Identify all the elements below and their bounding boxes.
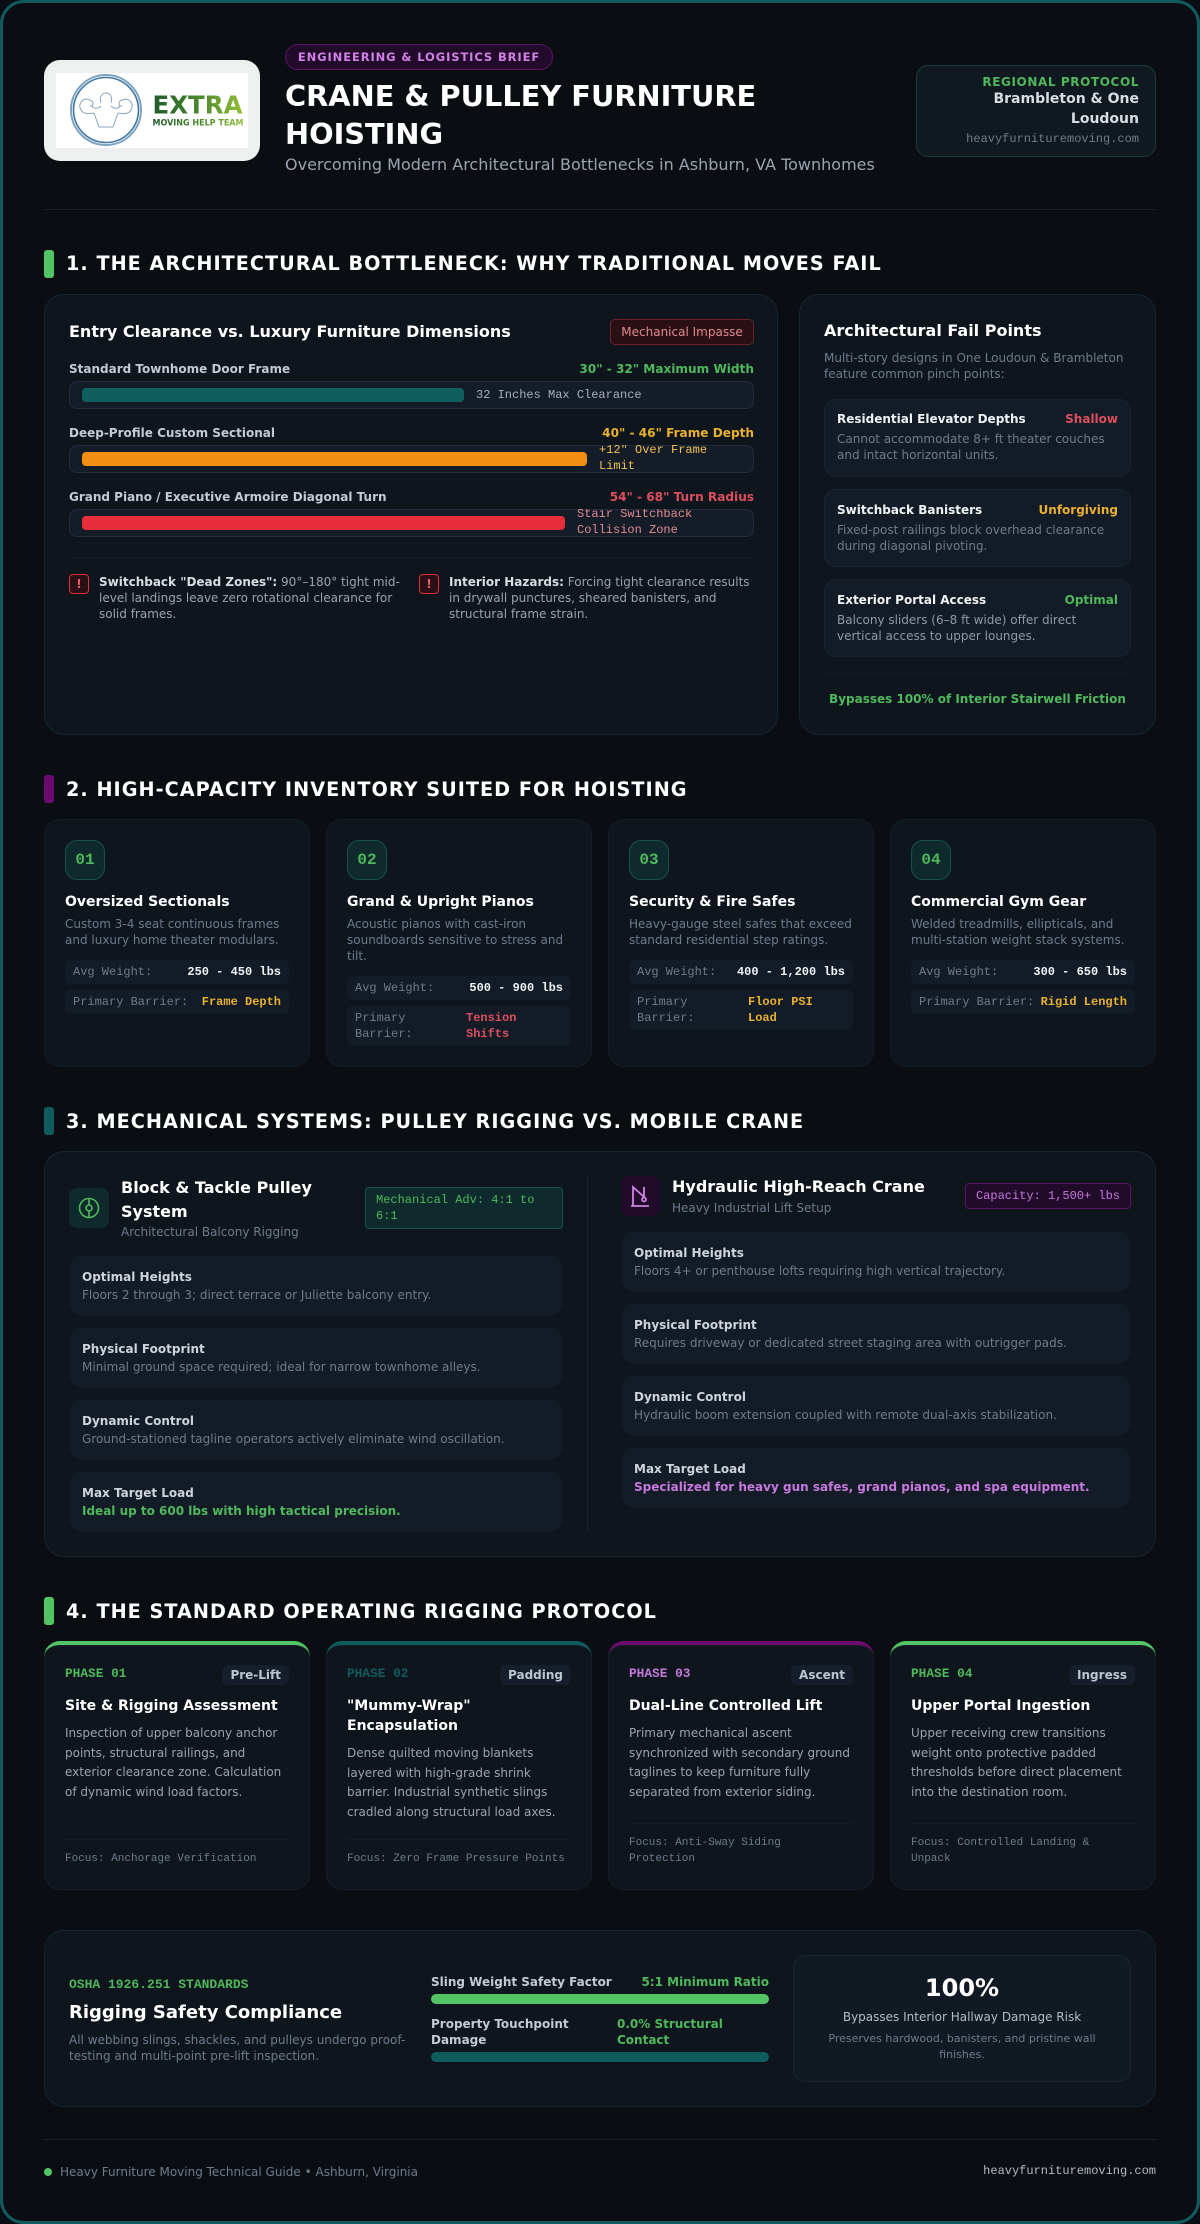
metric: touchpoint damage: 0.0% Structural <box>617 2017 723 2031</box>
subtitle: Overcoming Modern Architectural Bottlenecks in Ashburn, VA Townhomes <box>285 155 875 174</box>
phase card 4: into the destination room. <box>911 1784 1067 1798</box>
phase card 1: points, structural railings, and <box>65 1746 245 1760</box>
panel: entry clearance chart <box>44 294 778 735</box>
bar: piano <box>69 509 754 537</box>
row: control crane: Dynamic Control <box>634 1390 746 1404</box>
badge: mechanical advantage: 6:1 <box>376 1209 398 1223</box>
title <box>285 79 756 151</box>
section heading 4: 4. THE STANDARD OPERATING RIGGING PROTOCOL <box>66 1600 657 1623</box>
fail point: portal: Optimal <box>1065 593 1118 607</box>
row: control pulley: Dynamic Control <box>82 1414 194 1428</box>
phase card 4: Unpack <box>911 1853 951 1865</box>
card: gym gear: Welded treadmills, ellipticals, and <box>911 917 1113 931</box>
phase card 1 <box>44 1641 310 1890</box>
card: gym gear: Commercial Gym Gear <box>911 894 1086 910</box>
row: load pulley: Ideal up to 600 lbs with high tactical precision. <box>82 1504 401 1518</box>
stat box: 100%: 100% <box>925 1974 999 2002</box>
fail point: banisters: Switchback Banisters <box>837 503 982 517</box>
badge: capacity <box>965 1183 1131 1209</box>
row: footprint crane: Physical Footprint <box>634 1318 757 1332</box>
metric: touchpoint damage: Property Touchpoint <box>431 2017 569 2031</box>
compliance text: All webbing slings, shackles, and pulleys undergo proof- <box>69 2033 405 2047</box>
panel heading: Architectural Fail Points <box>824 321 1042 340</box>
phase card 3: Dual-Line Controlled Lift <box>629 1698 822 1714</box>
compliance text: testing and multi-point pre-lift inspection. <box>69 2049 319 2063</box>
phase card 3: PHASE 03 <box>629 1666 690 1681</box>
fail point: portal: vertical access to upper lounges. <box>837 629 1036 643</box>
fail point: elevator: and intact horizontal units. <box>837 448 998 462</box>
card: safes: Security & Fire Safes <box>629 894 795 910</box>
fail point: elevator: Shallow <box>1065 412 1118 426</box>
fail point: banisters <box>824 489 1131 567</box>
card: safes: 03 <box>639 851 659 869</box>
stat box: 100%: Bypasses Interior Hallway Damage Risk <box>843 2010 1081 2024</box>
section heading 1: 1. THE ARCHITECTURAL BOTTLENECK: WHY TRADITIONAL MOVES FAIL <box>66 252 882 275</box>
pulley subtitle: Architectural Balcony Rigging <box>121 1225 299 1239</box>
alert: dead zones: solid frames. <box>99 607 176 621</box>
card: pianos: Acoustic pianos with cast-iron <box>347 917 526 931</box>
phase card 4: thresholds before direct placement <box>911 1765 1122 1779</box>
row: optimal heights crane: Floors 4+ or penthouse lofts requiring high vertical trajectory. <box>634 1264 1005 1278</box>
row: optimal heights pulley: Optimal Heights <box>82 1270 192 1284</box>
badge: mechanical impasse: Mechanical Impasse <box>621 325 743 339</box>
alert: dead zones <box>69 574 400 621</box>
fail point: banisters: during diagonal pivoting. <box>837 539 987 553</box>
header eyebrow badge <box>285 44 553 70</box>
card: pianos: Barrier: <box>355 1027 413 1041</box>
phase card 2 <box>326 1641 592 1890</box>
card: safes: Primary <box>637 995 687 1009</box>
card: pianos: tilt. <box>347 949 367 963</box>
phase card 3: Focus: Anti-Sway Siding <box>629 1837 781 1849</box>
phase card 3: Protection <box>629 1853 695 1865</box>
bar: sectional <box>69 445 754 473</box>
phase card 2: barrier. Industrial synthetic slings <box>347 1785 547 1799</box>
fail point: elevator: Cannot accommodate 8+ ft theater couches <box>837 432 1105 446</box>
phase card 3: taglines to keep furniture fully <box>629 1765 810 1779</box>
card: safes: Barrier: <box>637 1011 695 1025</box>
bar value: piano: 54" - 68" Turn Radius <box>610 490 754 504</box>
metric: sling factor: Sling Weight Safety Factor <box>431 1975 612 1989</box>
bar label: sectional: Deep-Profile Custom Sectional <box>69 426 275 440</box>
alert: interior hazards: Interior Hazards: Forcing tight clearance results <box>449 575 750 589</box>
phase card 3: Ascent <box>799 1668 845 1682</box>
footer: heavyfurnituremoving.com <box>983 2164 1156 2178</box>
row: footprint pulley: Physical Footprint <box>82 1342 205 1356</box>
badge: mechanical impasse <box>610 319 754 345</box>
row: load pulley: Max Target Load <box>82 1486 194 1500</box>
regional protocol box: Loudoun <box>1071 111 1139 127</box>
card: safes: 400 - 1,200 lbs <box>737 965 845 979</box>
stat box: 100%: finishes. <box>939 2048 985 2061</box>
panel: mechanical systems comparison <box>44 1151 1156 1557</box>
phase card 3: Primary mechanical ascent <box>629 1726 792 1740</box>
metric: touchpoint damage: Contact <box>617 2033 669 2047</box>
card: safes: Avg Weight: <box>637 965 716 979</box>
regional protocol box: heavyfurnituremoving.com <box>966 132 1139 146</box>
chart heading: Entry Clearance vs. Luxury Furniture Dimensions <box>69 322 511 341</box>
row: footprint pulley <box>69 1328 563 1388</box>
fail point: portal: Exterior Portal Access <box>837 593 986 607</box>
phase card 1: exterior clearance zone. Calculation <box>65 1765 281 1779</box>
phase card 2: Padding <box>508 1668 563 1682</box>
header logo <box>44 60 260 161</box>
bar: piano: Collision Zone <box>577 523 678 537</box>
bar: door frame <box>69 381 754 409</box>
card: gym gear: Avg Weight: <box>919 965 998 979</box>
card: sectionals: 250 - 450 lbs <box>187 965 281 979</box>
phase card 1: Site & Rigging Assessment <box>65 1698 278 1714</box>
row: optimal heights pulley: Floors 2 through 3; direct terrace or Juliette balcony entry. <box>82 1288 431 1302</box>
crane heading: Hydraulic High-Reach Crane <box>672 1177 925 1196</box>
bar value: door frame: 30" - 32" Maximum Width <box>579 362 754 376</box>
card: sectionals: Frame Depth <box>202 995 281 1009</box>
phase card 1: PHASE 01 <box>65 1666 126 1681</box>
row: control crane: Hydraulic boom extension coupled with remote dual-axis stabilization. <box>634 1408 1057 1422</box>
card: pianos <box>326 819 592 1067</box>
row: control pulley <box>69 1400 563 1460</box>
phase card 2: layered with high-grade shrink <box>347 1766 531 1780</box>
card: pianos: Avg Weight: <box>355 981 434 995</box>
row: optimal heights pulley <box>69 1256 563 1316</box>
regional protocol box <box>916 65 1156 157</box>
alert: interior hazards: ! <box>426 577 432 591</box>
card: safes <box>608 819 874 1067</box>
phase card 3: synchronized with secondary ground <box>629 1746 850 1760</box>
row: optimal heights crane: Optimal Heights <box>634 1246 744 1260</box>
section heading 3: 3. MECHANICAL SYSTEMS: PULLEY RIGGING VS. MOBILE CRANE <box>66 1110 804 1133</box>
row: control pulley: Ground-stationed tagline operators actively eliminate wind oscillation. <box>82 1432 505 1446</box>
card: gym gear: Primary Barrier: <box>919 995 1034 1009</box>
phase card 1: Pre-Lift <box>230 1668 281 1682</box>
alert: interior hazards: in drywall punctures, sheared banisters, and <box>449 591 716 605</box>
fail point: portal: Balcony sliders (6–8 ft wide) offer direct <box>837 613 1076 627</box>
row: load crane: Specialized for heavy gun safes, grand pianos, and spa equipment. <box>634 1480 1090 1494</box>
stat box: 100%: Preserves hardwood, banisters, and pristine wall <box>828 2032 1096 2045</box>
bar: sectional: Limit <box>599 459 635 473</box>
alert: dead zones: level landings leave zero rotational clearance for <box>99 591 392 605</box>
header eyebrow badge: ENGINEERING & LOGISTICS BRIEF <box>298 50 540 64</box>
metric: sling factor <box>431 1975 769 2004</box>
phase card 3 <box>608 1641 874 1890</box>
row: load pulley <box>69 1472 563 1532</box>
stat box: 100% <box>793 1955 1131 2082</box>
row: optimal heights crane <box>621 1232 1131 1292</box>
title: HOISTING <box>285 117 443 151</box>
row: footprint crane <box>621 1304 1131 1364</box>
metric: sling factor: 5:1 Minimum Ratio <box>641 1975 769 1989</box>
alert: dead zones: Switchback "Dead Zones": 90°–180° tight mid- <box>99 575 400 589</box>
bar: door frame: 32 Inches Max Clearance <box>476 388 642 402</box>
phase card 1: of dynamic wind load factors. <box>65 1784 242 1798</box>
metric: touchpoint damage <box>431 2017 769 2062</box>
card: sectionals: Avg Weight: <box>73 965 152 979</box>
header logo: EXTRA <box>152 90 242 120</box>
fail point: portal <box>824 579 1131 657</box>
card: gym gear <box>890 819 1156 1067</box>
icon: crane <box>621 1176 660 1216</box>
phase card 4 <box>890 1641 1156 1890</box>
phase card 4: Upper receiving crew transitions <box>911 1726 1106 1740</box>
pulley heading: Block & Tackle Pulley <box>121 1178 312 1197</box>
alert: interior hazards: structural frame strain. <box>449 607 588 621</box>
card: sectionals: and luxury home theater modulars. <box>65 933 279 947</box>
footer: Heavy Furniture Moving Technical Guide • Ashburn, Virginia <box>60 2165 418 2179</box>
regional protocol box: REGIONAL PROTOCOL <box>982 75 1139 89</box>
metric: touchpoint damage: Damage <box>431 2033 486 2047</box>
alert: dead zones: ! <box>76 577 82 591</box>
card: pianos: 02 <box>357 851 377 869</box>
panel intro: Multi-story designs in One Loudoun & Brambleton <box>824 351 1123 365</box>
card: gym gear: Rigid Length <box>1041 995 1127 1009</box>
panel conclusion: Bypasses 100% of Interior Stairwell Friction <box>829 692 1126 706</box>
title: CRANE & PULLEY FURNITURE <box>285 79 756 113</box>
row: control crane <box>621 1376 1131 1436</box>
card: pianos: Tension <box>466 1011 516 1025</box>
panel: rigging safety compliance <box>44 1930 1156 2107</box>
fail point: banisters: Unforgiving <box>1039 503 1118 517</box>
phase card 4: Ingress <box>1077 1668 1127 1682</box>
pulley heading: System <box>121 1202 188 1221</box>
bar label: piano: Grand Piano / Executive Armoire Diagonal Turn <box>69 490 387 504</box>
card: pianos: Shifts <box>466 1027 509 1041</box>
row: load crane <box>621 1448 1131 1508</box>
crane subtitle: Heavy Industrial Lift Setup <box>672 1201 831 1215</box>
card: sectionals: Primary Barrier: <box>73 995 188 1009</box>
card: pianos: Primary <box>355 1011 405 1025</box>
card: pianos: soundboards sensitive to stress and <box>347 933 563 947</box>
card: safes: standard residential step ratings. <box>629 933 828 947</box>
compliance text <box>69 2033 405 2063</box>
panel: architectural fail points <box>799 294 1156 735</box>
icon: pulley <box>69 1188 109 1228</box>
phase card 1: Focus: Anchorage Verification <box>65 1853 256 1865</box>
card: sectionals: 01 <box>75 851 95 869</box>
phase card 3: separated from exterior siding. <box>629 1784 815 1798</box>
header logo: MOVING HELP TEAM <box>152 118 244 128</box>
bar value: sectional: 40" - 46" Frame Depth <box>602 426 754 440</box>
phase card 2: Encapsulation <box>347 1718 458 1734</box>
phase card 4: weight onto protective padded <box>911 1746 1096 1760</box>
card: gym gear: multi-station weight stack systems. <box>911 933 1125 947</box>
phase card 2: cradled along structural load axes. <box>347 1804 556 1818</box>
phase card 2: Focus: Zero Frame Pressure Points <box>347 1853 565 1865</box>
card: gym gear: 04 <box>921 851 941 869</box>
row: footprint pulley: Minimal ground space required; ideal for narrow townhome alleys. <box>82 1360 481 1374</box>
row: load crane: Max Target Load <box>634 1462 746 1476</box>
osha label: OSHA 1926.251 STANDARDS <box>69 1977 248 1992</box>
fail point: elevator <box>824 399 1131 477</box>
card: gym gear: 300 - 650 lbs <box>1033 965 1127 979</box>
phase card 4: PHASE 04 <box>911 1666 972 1681</box>
fail point: elevator: Residential Elevator Depths <box>837 412 1026 426</box>
card: safes: Load <box>748 1011 777 1025</box>
card: safes: Floor PSI <box>748 995 813 1009</box>
regional protocol box: Brambleton & One <box>993 91 1139 107</box>
phase card 4: Focus: Controlled Landing & <box>911 1837 1089 1849</box>
panel intro: feature common pinch points: <box>824 367 1005 381</box>
badge: mechanical advantage <box>365 1187 563 1229</box>
badge: capacity: Capacity: 1,500+ lbs <box>976 1189 1120 1203</box>
phase card 2: Dense quilted moving blankets <box>347 1746 533 1760</box>
compliance heading: Rigging Safety Compliance <box>69 2002 342 2023</box>
footer <box>44 2164 1156 2179</box>
card: sectionals: Oversized Sectionals <box>65 894 230 910</box>
phase card 1: Inspection of upper balcony anchor <box>65 1726 277 1740</box>
card: sectionals: Custom 3-4 seat continuous frames <box>65 917 279 931</box>
phase card 2: PHASE 02 <box>347 1666 408 1681</box>
alert: interior hazards <box>419 574 750 621</box>
phase card 4: Upper Portal Ingestion <box>911 1698 1090 1714</box>
row: footprint crane: Requires driveway or dedicated street staging area with outrigger pads. <box>634 1336 1067 1350</box>
card: sectionals <box>44 819 310 1067</box>
pulley heading <box>121 1178 312 1221</box>
section heading 2: 2. HIGH-CAPACITY INVENTORY SUITED FOR HOISTING <box>66 778 688 801</box>
panel intro <box>824 351 1123 381</box>
badge: mechanical advantage: Mechanical Adv: 4:1 to <box>376 1193 534 1207</box>
bar label: door frame: Standard Townhome Door Frame <box>69 362 290 376</box>
card: pianos: Grand & Upright Pianos <box>347 894 534 910</box>
card: safes: Heavy-gauge steel safes that exceed <box>629 917 852 931</box>
phase card 2: "Mummy-Wrap" <box>347 1698 471 1714</box>
card: pianos: 500 - 900 lbs <box>469 981 563 995</box>
fail point: banisters: Fixed-post railings block overhead clearance <box>837 523 1104 537</box>
